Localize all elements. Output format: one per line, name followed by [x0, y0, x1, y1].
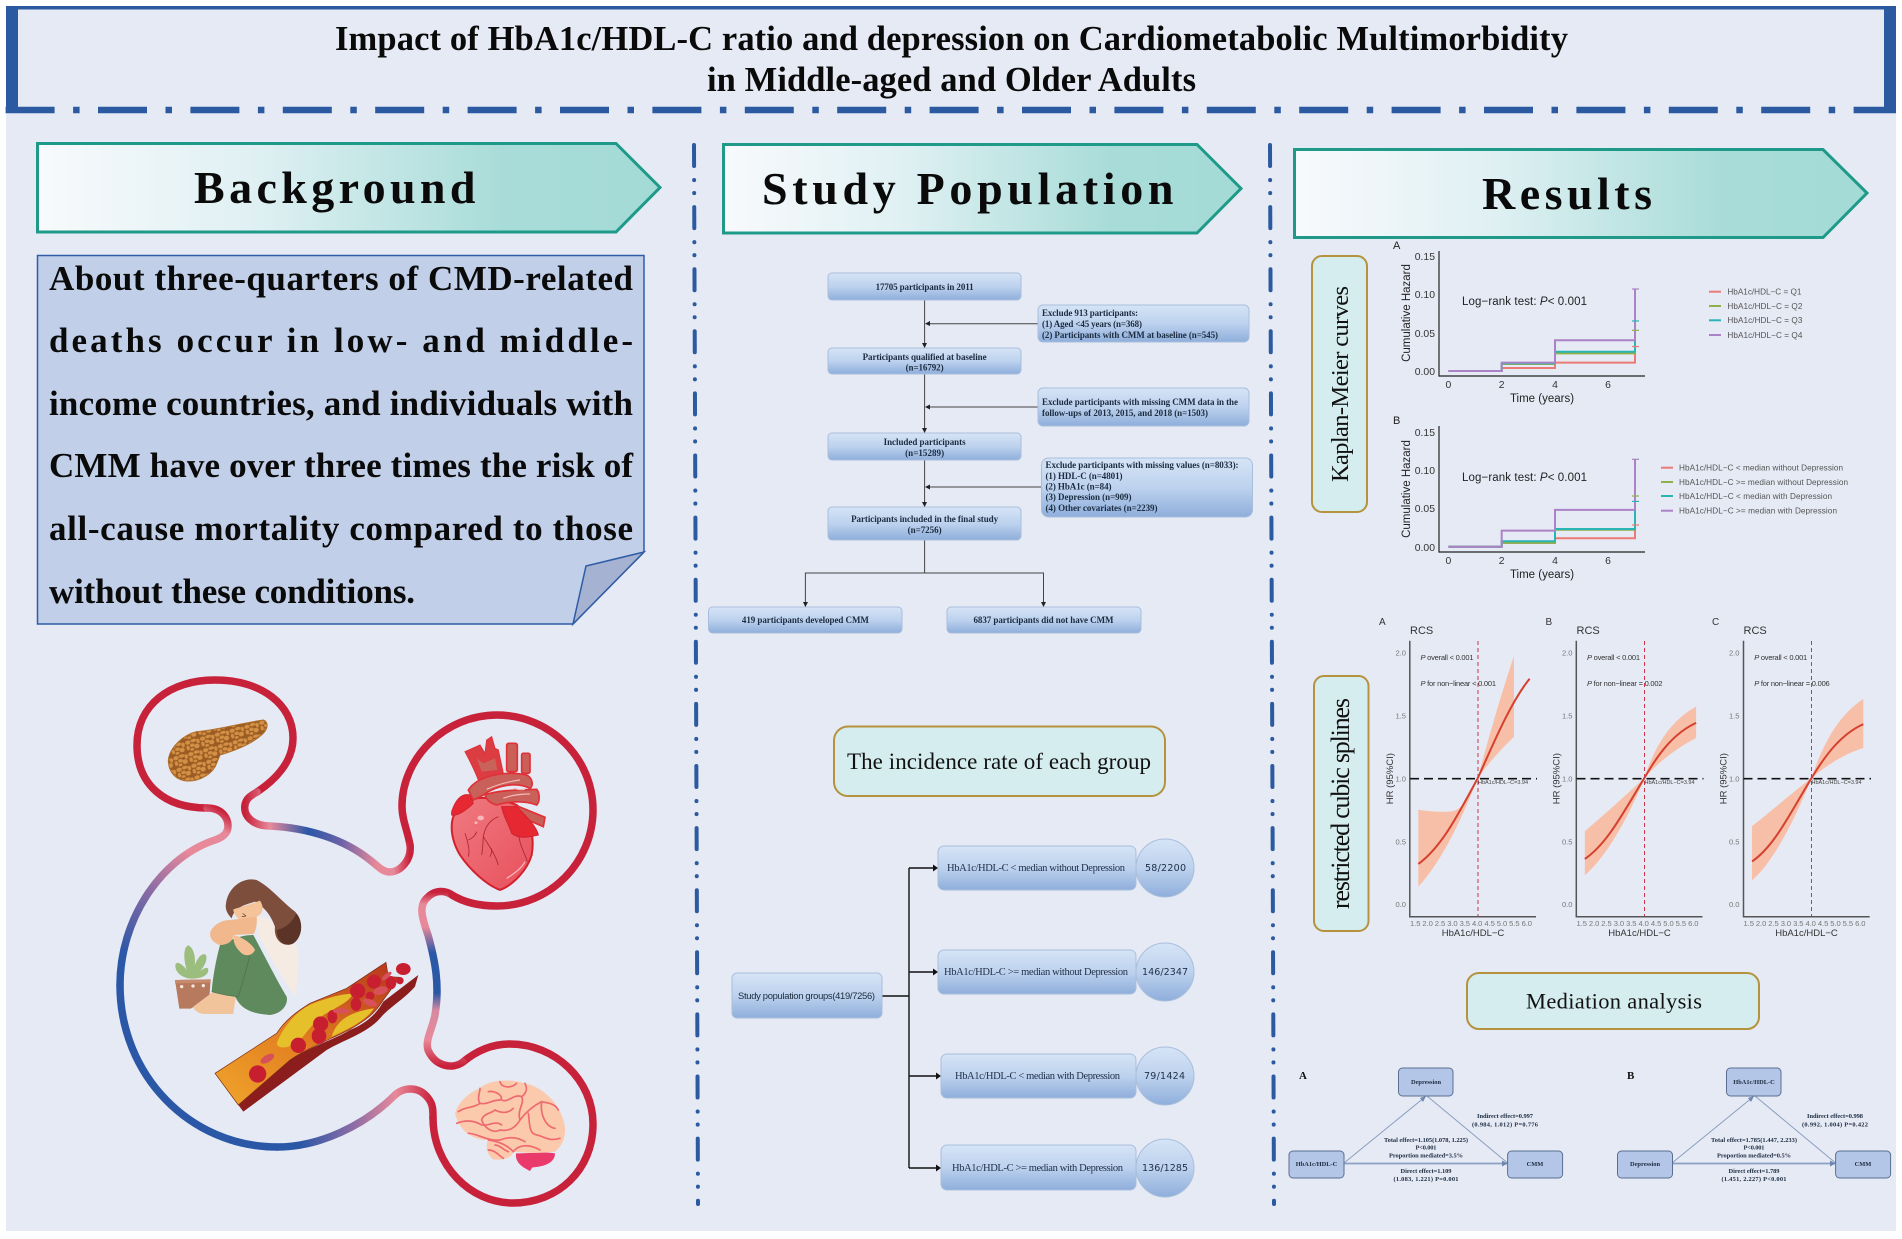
group 1 — [938, 839, 1194, 897]
legend: Kaplan-Meier B: HbA1c/HDL−C < median with Depression — [1679, 492, 1832, 501]
diagram: mediation A: P<0.001 — [1416, 1144, 1436, 1152]
chart: RCS A: A — [1379, 617, 1386, 628]
chart: RCS C: 1.5 — [1729, 712, 1740, 720]
chart: RCS B — [1546, 617, 1704, 939]
icon: heart — [452, 737, 545, 890]
heading tag: incidence rate: The incidence rate of each group — [847, 749, 1151, 774]
diagram: mediation B: Direct effect=1.789 — [1728, 1168, 1780, 1175]
chart: RCS C: C — [1712, 617, 1719, 628]
chart: Kaplan-Meier A: 0.00 — [1415, 367, 1435, 378]
flow box: developed CMM: 419 participants developed CMM — [742, 615, 869, 625]
chart: Kaplan-Meier A: Log−rank test: P< 0.001 — [1462, 296, 1587, 308]
chart: Kaplan-Meier A: 6 — [1605, 380, 1611, 391]
group tree diagram — [732, 839, 1194, 1197]
column divider left — [694, 145, 698, 1204]
chart: Kaplan-Meier B: Log−rank test: P< 0.001 — [1462, 472, 1587, 484]
tag: Mediation analysis — [1467, 973, 1759, 1029]
flow box: included: (n=15289) — [905, 448, 944, 458]
diagram: mediation A: (0.984, 1.012) P=0.776 — [1472, 1122, 1539, 1128]
chart: RCS C: RCS — [1744, 625, 1767, 637]
diagram: mediation A: Depression — [1411, 1079, 1441, 1086]
diagram: mediation B: HbA1c/HDL-C — [1733, 1079, 1775, 1086]
chart: Kaplan-Meier B: 0 — [1446, 556, 1452, 567]
chart: Kaplan-Meier A: 0.15 — [1415, 252, 1435, 263]
flow box: 17705 participants: 17705 participants in 2011 — [876, 282, 974, 292]
group 3: 79/1424 — [1144, 1071, 1185, 1082]
flow box: exclude 913: (2) Participants with CMM at baseline (n=545) — [1042, 330, 1218, 340]
diagram: mediation A: Proportion mediated=3.5% — [1389, 1152, 1463, 1160]
group 4: HbA1c/HDL-C >= median with Depression — [952, 1163, 1124, 1174]
chart: Kaplan-Meier B — [1393, 415, 1645, 581]
chart: RCS A — [1379, 617, 1537, 939]
panel: study population — [708, 144, 1252, 1197]
chart: RCS B: P for non−linear = 0.002 — [1587, 679, 1662, 688]
flow box: qualified: (n=16792) — [906, 362, 944, 372]
heading arrow: Background — [38, 144, 660, 232]
diagram: mediation B: Indirect effect=0.998 — [1807, 1113, 1863, 1120]
group 3: HbA1c/HDL-C < median with Depression — [955, 1071, 1121, 1082]
legend: Kaplan-Meier A: HbA1c/HDL−C = Q1 — [1727, 288, 1802, 296]
flow box: qualified — [828, 348, 1021, 374]
legend: Kaplan-Meier B: HbA1c/HDL−C >= median without Depression — [1679, 478, 1848, 487]
icon: sad woman with plant — [175, 879, 301, 1015]
flow box: no CMM — [947, 607, 1141, 633]
text block with folded corner: income countries, and individuals with — [49, 384, 633, 423]
diagram: mediation B: Total effect=1.785(1.447, 2.233) — [1711, 1137, 1797, 1144]
chart: RCS A: 0.5 — [1395, 838, 1406, 846]
group 4 — [941, 1139, 1194, 1197]
chart: RCS C: P overall < 0.001 — [1754, 653, 1807, 662]
chart: Kaplan-Meier B: 0.10 — [1415, 466, 1435, 477]
chart: RCS A: 1.5 2.0 2.5 3.0 3.5 4.0 4.5 5.0 5.5 6.0 — [1410, 919, 1532, 928]
diagram: mediation A: Direct effect=1.109 — [1400, 1168, 1452, 1175]
diagram: mediation B: B — [1627, 1070, 1635, 1082]
text block with folded corner: deaths occur in low- and middle- — [49, 321, 633, 360]
heading tag: incidence rate — [834, 726, 1165, 796]
chart: RCS A: 2.0 — [1395, 648, 1406, 658]
flow box: qualified: Participants qualified at baseline — [863, 352, 987, 362]
group 1: 58/2200 — [1145, 863, 1186, 874]
chart: Kaplan-Meier B: B — [1393, 415, 1400, 427]
diagram: mediation B: P<0.001 — [1744, 1144, 1764, 1152]
chart: Kaplan-Meier B: 6 — [1605, 556, 1611, 567]
chart: RCS A: P for non−linear < 0.001 — [1420, 679, 1496, 688]
heading arrow: Background: Background — [194, 162, 476, 213]
text block with folded corner: About three-quarters of CMD-related — [49, 259, 634, 298]
column divider right — [1270, 145, 1274, 1204]
title text: Impact of HbA1c/HDL-C ratio and depression on Cardiometabolic Multimorbidity — [335, 20, 1568, 58]
chart: Kaplan-Meier A: Time (years) — [1510, 393, 1574, 405]
flow box: final study: (n=7256) — [908, 525, 942, 535]
diagram: mediation B: (0.992, 1.004) P=0.422 — [1802, 1122, 1868, 1128]
diagram: mediation B: (1.451, 2.227) P<0.001 — [1722, 1176, 1786, 1183]
legend: Kaplan-Meier B — [1661, 464, 1848, 516]
group 4: 136/1285 — [1142, 1163, 1188, 1174]
chart: Kaplan-Meier A: Cumulative Hazard — [1401, 264, 1413, 362]
legend: Kaplan-Meier B: HbA1c/HDL−C >= median with Depression — [1679, 506, 1837, 516]
diagram: mediation B: Proportion mediated=0.5% — [1717, 1152, 1791, 1160]
flow box: exclude 913: Exclude 913 participants: — [1042, 308, 1138, 318]
group 3 — [941, 1047, 1194, 1105]
heading arrow: Results — [1294, 150, 1867, 238]
flow box: final study: Participants included in the final study — [851, 514, 999, 524]
tag: restricted cubic splines — [1314, 676, 1368, 931]
group 1: HbA1c/HDL-C < median without Depression — [947, 863, 1126, 874]
chart: RCS C: HbA1c/HDL−C — [1775, 928, 1838, 939]
root box: Study population groups(419/7256) — [738, 990, 875, 1001]
chart: Kaplan-Meier B: 2 — [1499, 556, 1505, 567]
group 2: 146/2347 — [1142, 967, 1188, 978]
flow box: exclude 913: (1) Aged <45 years (n=368) — [1042, 319, 1142, 329]
chart: RCS B: 1.0 — [1562, 774, 1572, 784]
chart: RCS B: HR (95%CI) — [1552, 753, 1562, 804]
chart: RCS A: HR (95%CI) — [1385, 753, 1396, 804]
chart: RCS C — [1712, 617, 1871, 939]
chart: RCS A: 1.0 — [1395, 774, 1406, 784]
flow box: exclude missing values: (2) HbA1c (n=84) — [1046, 482, 1112, 492]
chart: RCS C: HbA1c/HDL−C=3.94 — [1812, 780, 1862, 786]
heading arrow: Results: Results — [1482, 168, 1652, 219]
chart: RCS C: 2.0 — [1729, 648, 1740, 658]
heading arrow: Study Population: Study Population — [762, 163, 1174, 214]
chart: RCS B: HbA1c/HDL−C — [1608, 928, 1671, 939]
flow box: exclude missing values: (1) HDL-C (n=4801) — [1046, 471, 1122, 481]
flow box: exclude missing CMM — [1038, 388, 1249, 426]
group 2 — [938, 943, 1194, 1001]
heading arrow: Study Population — [724, 144, 1241, 233]
legend: Kaplan-Meier B: HbA1c/HDL−C < median without Depression — [1679, 464, 1843, 472]
chart: RCS B: 1.5 — [1562, 712, 1572, 720]
group 2: HbA1c/HDL-C >= median without Depression — [944, 967, 1129, 978]
tag: Kaplan-Meier curves — [1312, 256, 1367, 512]
flow box: exclude missing CMM: follow-ups of 2013, 2015, and 2018 (n=1503) — [1042, 408, 1208, 418]
icon: brain — [455, 1081, 565, 1171]
legend: Kaplan-Meier A: HbA1c/HDL−C = Q4 — [1727, 331, 1803, 340]
chart: RCS A: 1.5 — [1395, 712, 1406, 720]
title banner — [6, 6, 1896, 113]
chart: RCS C: 0.5 — [1729, 838, 1740, 846]
diagram: mediation A: HbA1c/HDL-C — [1296, 1161, 1338, 1168]
chart: Kaplan-Meier A: 2 — [1499, 380, 1505, 391]
text block with folded corner: without these conditions. — [49, 572, 415, 611]
diagram: mediation A: (1.083, 1.221) P=0.001 — [1394, 1176, 1458, 1183]
chart: RCS A: P overall < 0.001 — [1420, 653, 1474, 662]
panel: results — [1289, 150, 1891, 1183]
chart: Kaplan-Meier A: A — [1393, 240, 1401, 252]
chart: Kaplan-Meier B: 4 — [1552, 556, 1558, 567]
flow box: included — [828, 433, 1021, 460]
chart: RCS A: HbA1c/HDL−C — [1442, 928, 1504, 939]
tag: restricted cubic splines: restricted cubic splines — [1326, 698, 1355, 909]
chart: Kaplan-Meier A: 0.05 — [1415, 329, 1435, 340]
diagram: mediation A: Total effect=1.105(1.078, 1.225) — [1384, 1137, 1468, 1144]
chart: Kaplan-Meier A: 0.10 — [1415, 290, 1435, 301]
chart: RCS B: HbA1c/HDL−C=3.94 — [1644, 780, 1694, 786]
legend: Kaplan-Meier A: HbA1c/HDL−C = Q3 — [1727, 316, 1803, 325]
chart: Kaplan-Meier B: Cumulative Hazard — [1401, 440, 1413, 538]
diagram: mediation B — [1618, 1068, 1891, 1183]
title banner: in Middle-aged and Older Adults — [707, 61, 1196, 99]
chart: RCS C: P for non−linear = 0.006 — [1754, 679, 1830, 688]
flow box: exclude 913 — [1038, 305, 1249, 342]
chart: Kaplan-Meier B: Time (years) — [1510, 569, 1574, 581]
chart: Kaplan-Meier B: 0.05 — [1415, 504, 1435, 515]
diagram: mediation B: Depression — [1630, 1161, 1660, 1168]
chart: Kaplan-Meier B: 0.00 — [1415, 543, 1435, 554]
chart: RCS A: HbA1c/HDL−C=3.94 — [1478, 780, 1528, 786]
text block with folded corner: all-cause mortality compared to those — [49, 509, 633, 548]
diagram: mediation A: Indirect effect=0.997 — [1477, 1113, 1534, 1120]
chart: Kaplan-Meier A — [1393, 240, 1645, 405]
chart: Kaplan-Meier B: 0.15 — [1415, 428, 1435, 439]
chart: RCS C: 1.5 2.0 2.5 3.0 3.5 4.0 4.5 5.0 5.5 6.0 — [1744, 919, 1866, 928]
chart: RCS B: 0.5 — [1562, 838, 1572, 846]
flow box: final study — [828, 507, 1021, 540]
icon: artery with plaque — [215, 962, 418, 1112]
root box — [732, 973, 882, 1018]
chart: RCS B: 0.0 — [1562, 900, 1572, 909]
legend: Kaplan-Meier A — [1709, 288, 1803, 340]
tag: Kaplan-Meier curves: Kaplan-Meier curves — [1327, 286, 1354, 482]
flow box: no CMM: 6837 participants did not have CMM — [974, 615, 1114, 625]
flow box: exclude missing values: Exclude participants with missing values (n=8033): — [1046, 460, 1238, 470]
icon: pancreas — [168, 720, 267, 781]
flowchart — [708, 273, 1252, 633]
flow box: developed CMM — [708, 607, 902, 633]
diagram: mediation A: A — [1299, 1070, 1307, 1082]
chart: RCS B: B — [1546, 617, 1552, 628]
diagram: mediation A — [1289, 1068, 1563, 1183]
chart: RCS A: RCS — [1410, 625, 1433, 637]
outline connecting organs — [120, 680, 593, 1203]
legend: Kaplan-Meier A: HbA1c/HDL−C = Q2 — [1727, 302, 1803, 311]
chart: RCS B: 1.5 2.0 2.5 3.0 3.5 4.0 4.5 5.0 5.5 6.0 — [1576, 919, 1698, 928]
flow box: 17705 participants — [828, 273, 1021, 300]
chart: RCS B: P overall < 0.001 — [1587, 653, 1640, 662]
flow box: exclude missing values: (4) Other covariates (n=2239) — [1046, 503, 1158, 513]
chart: RCS A: 0.0 — [1395, 900, 1406, 909]
chart: RCS C: HR (95%CI) — [1718, 753, 1730, 804]
chart: RCS C: 0.0 — [1729, 900, 1740, 909]
chart: RCS C: 1.0 — [1729, 774, 1740, 784]
flow box: exclude missing CMM: Exclude participants with missing CMM data in the — [1042, 397, 1238, 407]
tag: Mediation analysis: Mediation analysis — [1526, 988, 1702, 1014]
chart: RCS B: RCS — [1576, 625, 1600, 637]
panel: background — [38, 144, 660, 1203]
chart: RCS B: 2.0 — [1562, 648, 1572, 658]
diagram: mediation B: CMM — [1855, 1161, 1871, 1168]
diagram: mediation A: CMM — [1527, 1161, 1543, 1168]
flow box: exclude missing values — [1042, 458, 1252, 517]
chart: Kaplan-Meier A: 0 — [1446, 380, 1452, 391]
text block with folded corner — [38, 256, 644, 624]
chart: Kaplan-Meier A: 4 — [1552, 380, 1558, 391]
illustration: multimorbidity organs — [120, 680, 593, 1203]
flow box: exclude missing values: (3) Depression (n=909) — [1046, 492, 1132, 502]
flow box: included: Included participants — [884, 437, 966, 447]
text block with folded corner: CMM have over three times the risk of — [49, 446, 633, 485]
